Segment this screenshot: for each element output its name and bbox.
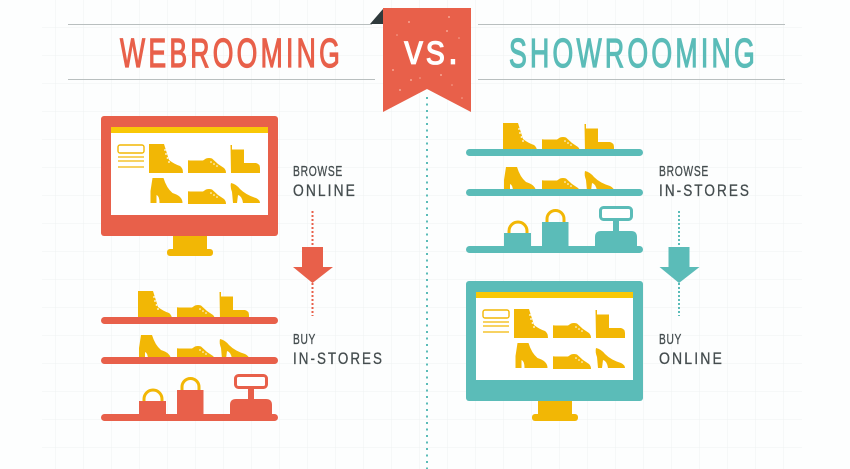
label: browse in-stores xyxy=(659,163,751,200)
title: webrooming: WEBROOMING xyxy=(120,30,343,76)
label: browse online xyxy=(293,163,357,200)
label: buy online xyxy=(659,331,724,368)
ribbon: vs. xyxy=(370,8,471,112)
center dotted divider xyxy=(426,97,428,469)
label: buy online: BUY xyxy=(659,331,682,348)
label: buy in-stores: IN-STORES xyxy=(293,350,384,368)
label: browse online: ONLINE xyxy=(293,182,357,200)
arrow: coral down xyxy=(293,211,333,316)
arrow: teal down xyxy=(660,211,700,316)
ribbon: vs.: vs. xyxy=(404,26,461,74)
store shelves: showrooming xyxy=(466,123,643,253)
label: browse in-stores: IN-STORES xyxy=(659,182,751,200)
store shelves: webrooming xyxy=(101,291,278,421)
label: buy in-stores xyxy=(293,331,384,368)
monitor: showrooming xyxy=(466,281,643,421)
label: buy in-stores: BUY xyxy=(293,331,316,348)
label: browse in-stores: BROWSE xyxy=(659,163,709,180)
monitor: webrooming xyxy=(101,116,278,256)
label: buy online: ONLINE xyxy=(659,350,724,368)
label: browse online: BROWSE xyxy=(293,163,343,180)
header rules xyxy=(68,24,785,80)
